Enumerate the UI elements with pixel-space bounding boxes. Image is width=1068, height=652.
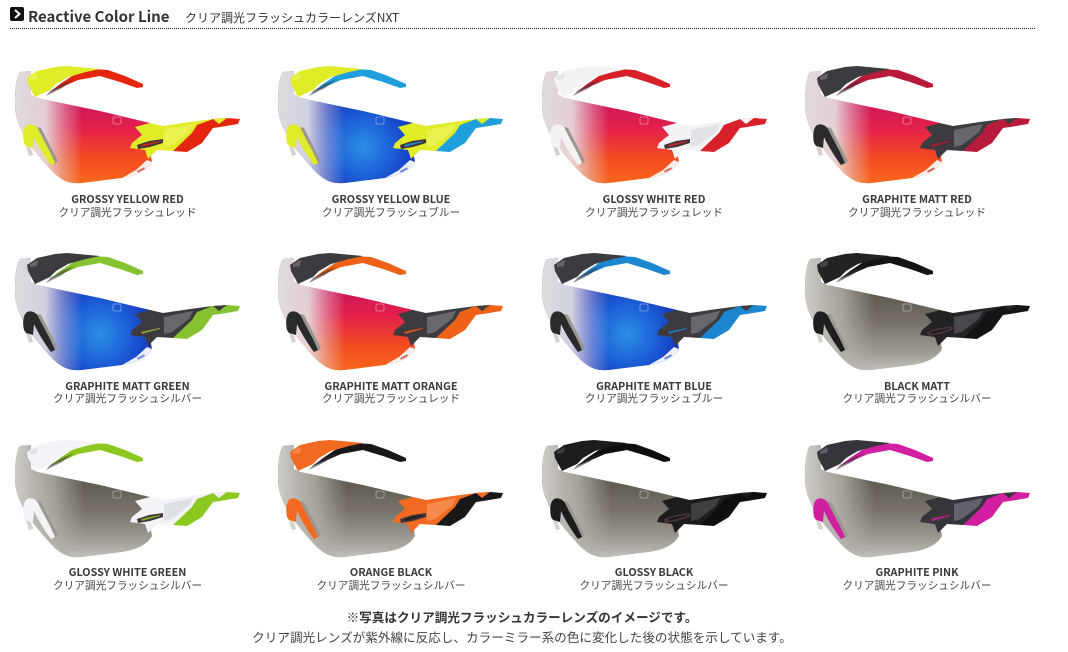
lens type: クリア調光フラッシュブルー — [585, 391, 723, 406]
lens type: クリア調光フラッシュレッド — [585, 205, 723, 220]
icon: sunglasses yellow blue — [278, 66, 503, 183]
product: Black Matt — [805, 253, 1030, 406]
product: Graphite Matt Orange — [278, 253, 503, 406]
icon: sunglasses graphite orange — [278, 253, 503, 370]
name: GRAPHITE MATT RED — [862, 191, 972, 207]
product: Graphite Matt Red — [805, 66, 1030, 220]
lens type: クリア調光フラッシュレッド — [58, 205, 197, 220]
lens type: クリア調光フラッシュシルバー — [53, 391, 202, 406]
name: ORANGE BLACK — [350, 564, 433, 580]
footnote — [252, 607, 792, 646]
name: GROSSY YELLOW BLUE — [332, 191, 450, 207]
title: Reactive Color Line — [28, 6, 170, 27]
name: GLOSSY WHITE GREEN — [69, 564, 186, 580]
product: Graphite Pink — [805, 440, 1030, 593]
name: GRAPHITE PINK — [876, 564, 959, 580]
icon: sunglasses graphite red — [805, 66, 1030, 183]
lens type: クリア調光フラッシュシルバー — [580, 578, 728, 593]
icon: sunglasses orange black — [278, 440, 503, 557]
icon: sunglasses graphite green — [15, 253, 240, 370]
icon: chevron badge — [10, 7, 24, 21]
lens type: クリア調光フラッシュシルバー — [317, 578, 465, 593]
icon: sunglasses white red — [542, 66, 767, 183]
name: GRAPHITE MATT GREEN — [65, 378, 190, 394]
lens type: クリア調光フラッシュレッド — [322, 391, 460, 406]
lens type: クリア調光フラッシュブルー — [322, 205, 460, 220]
name: BLACK MATT — [884, 378, 950, 394]
name: GLOSSY WHITE RED — [603, 191, 706, 207]
name: GLOSSY BLACK — [615, 564, 694, 580]
product: Graphite Matt Green — [15, 253, 240, 406]
note bold: ※写真はクリア調光フラッシュカラーレンズのイメージです。 — [347, 607, 697, 626]
product: Grossy Yellow Blue — [278, 66, 503, 220]
lens type: クリア調光フラッシュシルバー — [843, 578, 991, 593]
product: Glossy White Red — [542, 66, 767, 220]
icon: sunglasses yellow red — [15, 66, 240, 183]
note regular: クリア調光レンズが紫外線に反応し、カラーミラー系の色に変化した後の状態を示しています。 — [252, 627, 792, 646]
icon: sunglasses white green — [15, 440, 240, 557]
heading: Reactive Color Line — [10, 6, 399, 27]
product: Graphite Matt Blue — [542, 253, 767, 406]
icon: sunglasses glossy black — [542, 440, 767, 557]
product: Glossy White Green — [15, 440, 240, 593]
product: Grossy Yellow Red — [15, 66, 240, 220]
name: GRAPHITE MATT ORANGE — [325, 378, 457, 394]
name: GRAPHITE MATT BLUE — [596, 378, 712, 394]
product: Orange Black — [278, 440, 503, 593]
product: Glossy Black — [542, 440, 767, 593]
icon: sunglasses black matt — [805, 253, 1030, 370]
lens type: クリア調光フラッシュレッド — [848, 205, 986, 220]
subtitle: クリア調光フラッシュカラーレンズNXT — [185, 9, 399, 26]
name: GROSSY YELLOW RED — [71, 191, 184, 207]
icon: sunglasses graphite pink — [805, 440, 1030, 557]
lens type: クリア調光フラッシュシルバー — [843, 391, 991, 406]
icon: sunglasses graphite blue — [542, 253, 767, 370]
lens type: クリア調光フラッシュシルバー — [53, 578, 202, 593]
